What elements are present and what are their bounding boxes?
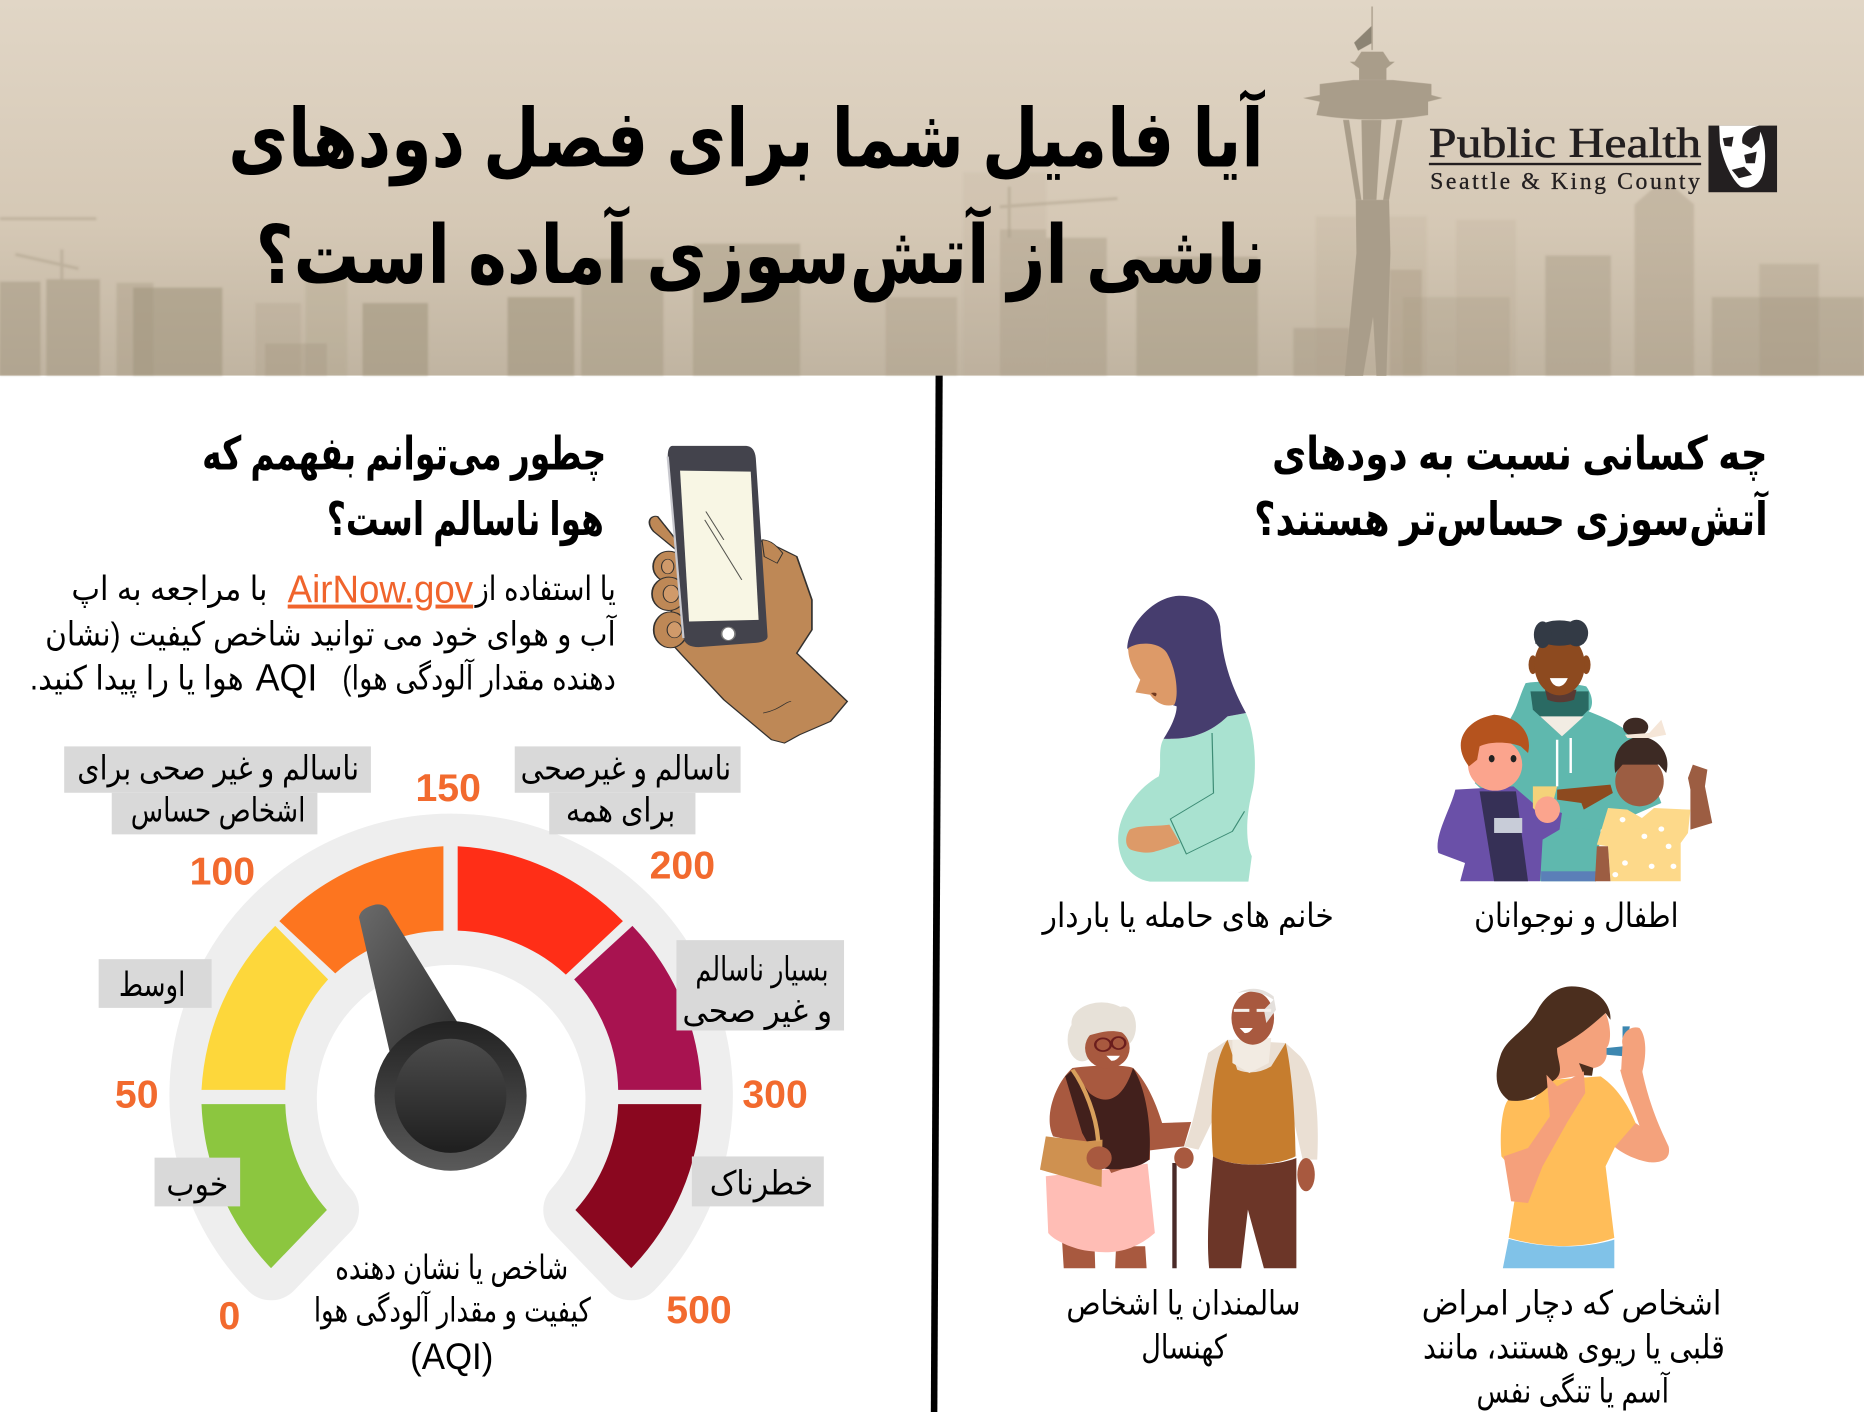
- icon: pregnant woman: [1118, 596, 1255, 882]
- label: unhealthy for all: برای همه: [566, 792, 675, 829]
- logo: Public Health Seattle & King County: [1429, 120, 1777, 195]
- label: very unhealthy: [676, 940, 844, 1030]
- segment: hazardous (dark red): [575, 1104, 701, 1268]
- label: hazardous: [692, 1156, 824, 1206]
- logo: Public Health Seattle & King County: Public Health: [1429, 120, 1701, 167]
- gauge scale numbers: 0: [219, 1294, 240, 1338]
- icon: elderly couple: [1040, 989, 1318, 1268]
- gauge caption: کیفیت و مقدار آلودگی هوا: [314, 1290, 591, 1330]
- gauge scale numbers: 100: [190, 849, 255, 893]
- logo: Public Health Seattle & King County: Seattle & King County: [1430, 169, 1700, 195]
- label: moderate: [99, 959, 212, 1008]
- panel: how to know heading: [202, 427, 606, 547]
- gauge caption: [314, 1250, 591, 1377]
- label: unhealthy for sensitive: اشخاص حساس: [131, 792, 306, 830]
- panel: who is more sensitive heading: [1254, 427, 1769, 546]
- gauge scale numbers: 150: [415, 766, 481, 810]
- chart: AQI gauge: [64, 746, 844, 1377]
- caption: seniors: [1066, 1286, 1301, 1367]
- gauge scale numbers: 500: [666, 1288, 732, 1332]
- text block: AirNow paragraph: دهنده مقدار آلودگی هوا): [342, 657, 616, 697]
- text block: AirNow paragraph: [30, 568, 617, 700]
- gauge scale numbers: [115, 766, 808, 1338]
- title: ناشی از آتش‌سوزی آماده است؟: [256, 205, 1266, 303]
- space needle silhouette: [1303, 7, 1442, 376]
- icon: children and teens: [1438, 620, 1712, 881]
- segment: sensitive (orange): [279, 846, 443, 973]
- label: moderate: اوسط: [119, 967, 185, 1004]
- gauge caption: شاخص یا نشان دهنده: [335, 1250, 568, 1288]
- label: hazardous: خطرناک: [710, 1165, 813, 1202]
- caption: seniors: کهنسال: [1141, 1330, 1227, 1367]
- icon: woman with inhaler: [1497, 986, 1669, 1268]
- label: unhealthy for all: [515, 746, 741, 834]
- text block: AirNow paragraph: AirNow.gov: [288, 568, 473, 612]
- icon: hand holding phone: [649, 446, 847, 743]
- segment: moderate (yellow): [201, 926, 328, 1090]
- caption: seniors: سالمندان یا اشخاص: [1066, 1286, 1301, 1324]
- caption: heart or lung disease: قلبی یا ریوی هستند، مانند: [1423, 1330, 1725, 1367]
- label: good: خوب: [166, 1167, 228, 1204]
- label: unhealthy for all: ناسالم و غیرصحی: [521, 751, 731, 788]
- header banner with smoky skyline: [0, 0, 1864, 376]
- text block: AirNow paragraph: AQI: [256, 658, 317, 700]
- caption: children and teens: اطفال و نوجوانان: [1474, 898, 1679, 935]
- caption: pregnant women: خانم های حامله یا باردار: [1041, 898, 1334, 935]
- vertical divider: [931, 376, 943, 1412]
- segment: very unhealthy (purple): [574, 926, 701, 1090]
- gauge scale numbers: 50: [115, 1073, 159, 1117]
- label: unhealthy for sensitive: ناسالم و غیر صحی برای: [77, 751, 359, 788]
- gauge needle: [359, 904, 527, 1171]
- text block: AirNow paragraph: با مراجعه به اپ: [71, 571, 267, 608]
- label: good: [155, 1158, 240, 1206]
- text block: AirNow paragraph: یا استفاده از: [474, 571, 616, 608]
- caption: heart or lung disease: اشخاص که دچار امراض: [1422, 1286, 1721, 1324]
- segment: unhealthy (red): [458, 846, 623, 975]
- gauge scale numbers: 300: [742, 1073, 808, 1117]
- label: very unhealthy: بسیار ناسالم: [695, 952, 829, 989]
- gauge background band: [201, 846, 701, 1268]
- gauge caption: (AQI): [410, 1336, 493, 1377]
- gauge scale numbers: 200: [650, 843, 715, 887]
- text block: AirNow paragraph: آب و هوای خود می توانید شاخص کیفیت (نشان: [45, 613, 617, 654]
- caption: heart or lung disease: آسم یا تنگی نفس: [1476, 1370, 1670, 1410]
- caption: heart or lung disease: [1422, 1286, 1725, 1410]
- panel: how to know heading: هوا ناسالم است؟: [327, 493, 604, 547]
- panel: how to know heading: چطور می‌توانم بفهمم که: [202, 427, 606, 481]
- title: آیا فامیل شما برای فصل دودهای: [228, 88, 1266, 186]
- label: unhealthy for sensitive: [64, 746, 371, 834]
- segment: good (green): [201, 1104, 327, 1268]
- label: very unhealthy: و غیر صحی: [682, 993, 832, 1030]
- text block: AirNow paragraph: هوا یا را پیدا کنید.: [30, 660, 244, 697]
- title: [228, 88, 1266, 303]
